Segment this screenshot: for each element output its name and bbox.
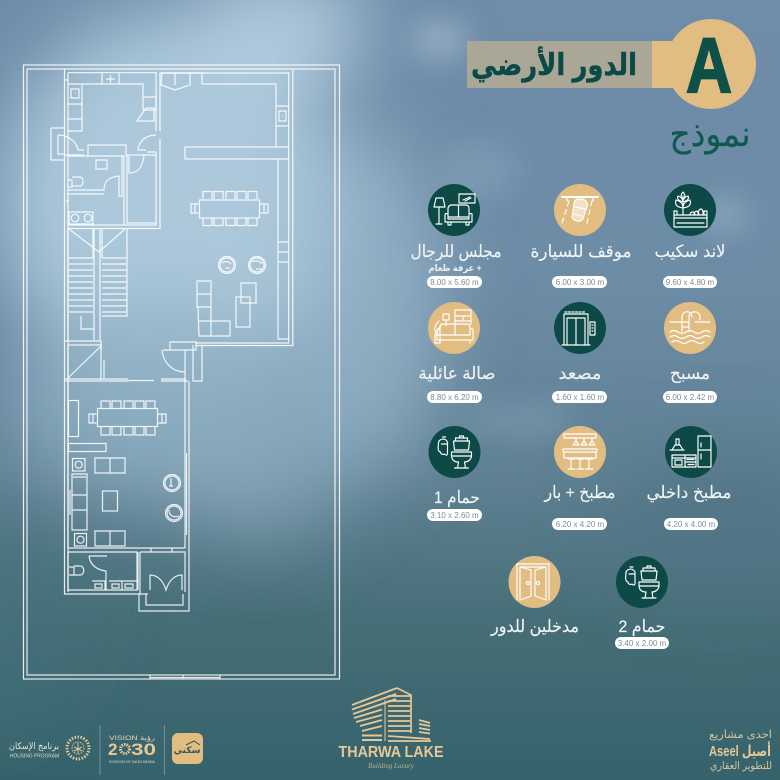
divider — [100, 725, 164, 775]
dimensions pill: 8.00 x 5.60 m — [430, 278, 479, 287]
logo: Tharwa Lake — [338, 688, 444, 770]
room item: parking — [530, 184, 632, 288]
room item: bathroom 2 — [615, 556, 669, 649]
header: floor title — [467, 19, 756, 155]
dimensions pill: 6.00 x 3.00 m — [556, 278, 605, 287]
label: مسبح — [670, 364, 710, 384]
floor title text: الدور الأرضي — [471, 46, 637, 83]
lower lounge walls — [68, 380, 189, 594]
label: مصعد — [558, 364, 602, 383]
site boundary — [24, 65, 340, 680]
dimensions pill: 4.20 x 4.00 m — [667, 520, 716, 529]
digit 2: 2 — [108, 740, 117, 759]
label: موقف للسيارة — [530, 242, 632, 261]
icon: bar counter — [554, 426, 606, 478]
vision line: VISION رؤية — [109, 735, 155, 742]
title bar — [467, 41, 682, 88]
upper sofa and coffee tables — [197, 281, 256, 336]
dimensions pill: 9.60 x 4.80 m — [666, 278, 715, 287]
icon: kitchen units — [665, 426, 717, 478]
icon: sofa and lamp — [428, 184, 480, 236]
icon: emblem — [67, 737, 89, 759]
housing program english: HOUSING PROGRAM — [10, 754, 59, 760]
label: لاند سكيب — [654, 242, 726, 261]
logo: housing program — [9, 737, 89, 760]
lower lounge seating — [70, 458, 182, 546]
label: مطبخ + بار — [544, 483, 616, 503]
icon: car parking — [554, 184, 606, 236]
upper dining table — [191, 192, 268, 226]
room item: landscape — [654, 184, 726, 288]
room item: men's majlis — [410, 184, 502, 288]
hall partition and door — [65, 342, 202, 381]
digits 30: 30 — [131, 740, 156, 759]
vision small print: KINGDOM OF SAUDI ARABIA — [109, 760, 156, 764]
icon: pool ladder — [664, 302, 716, 354]
dimensions pill: 1.60 x 1.60 m — [556, 393, 605, 402]
icon: lift doors — [554, 302, 606, 354]
lower dining table — [68, 400, 166, 452]
label: مطبخ داخلي — [646, 483, 732, 503]
logo wordmark: THARWA LAKE — [338, 744, 444, 761]
dimensions pill: 3.10 x 2.60 m — [430, 511, 479, 520]
dimensions pill: 6.00 x 2.42 m — [666, 393, 715, 402]
housing program arabic: برنامج الإسكان — [9, 741, 59, 752]
room item: inner kitchen — [646, 426, 732, 530]
room item: family lounge — [418, 302, 496, 403]
logo building mark — [352, 688, 431, 741]
dimensions pill: 8.80 x 6.20 m — [430, 393, 479, 402]
model word: نموذج — [670, 115, 750, 155]
lift shaft — [68, 345, 104, 380]
room item: kitchen and bar — [544, 426, 616, 530]
icon: toilet — [616, 556, 668, 608]
label: مدخلين للدور — [490, 617, 579, 636]
toilet bathroom block — [51, 128, 156, 225]
floor plan — [24, 65, 340, 680]
logo: vision 2030 — [108, 735, 156, 764]
room item: pool — [663, 302, 717, 403]
room item: elevator — [552, 302, 607, 403]
logo: Aseel developer — [709, 729, 772, 772]
icon: vision emblem — [120, 744, 130, 754]
icon: toilet — [428, 426, 480, 478]
logo: sakani app — [172, 733, 203, 764]
upper reception and kitchen walls — [64, 69, 293, 594]
logo tagline: Building Luxury — [368, 762, 415, 770]
lower bathroom — [69, 552, 138, 590]
room item: two entrances — [490, 556, 579, 636]
icon: double door — [508, 556, 560, 608]
developer line 3: للتطوير العقاري — [710, 760, 772, 772]
model letter: A — [686, 22, 732, 109]
logo: sakani app: سكني — [174, 745, 201, 755]
entrance porch and doors — [139, 575, 189, 611]
label: صالة عائلية — [418, 364, 496, 383]
developer line 1: احدى مشاريع — [709, 729, 772, 741]
stools — [218, 256, 266, 274]
dimensions pill: 3.40 x 2.00 m — [618, 639, 667, 648]
label: مجلس للرجال — [410, 242, 502, 261]
staircase — [65, 228, 127, 350]
room item: bathroom 1 — [427, 426, 482, 521]
icon: planter — [664, 184, 716, 236]
developer name: Aseel أصيل — [709, 741, 771, 760]
badge circle — [666, 19, 756, 109]
label: حمام 2 — [619, 617, 666, 636]
label: حمام 1 — [434, 488, 480, 507]
sublabel: + غرفة طعام — [428, 263, 482, 274]
icon: lounge sofa and shelf — [428, 302, 480, 354]
dimensions pill: 6.20 x 4.20 m — [556, 520, 605, 529]
